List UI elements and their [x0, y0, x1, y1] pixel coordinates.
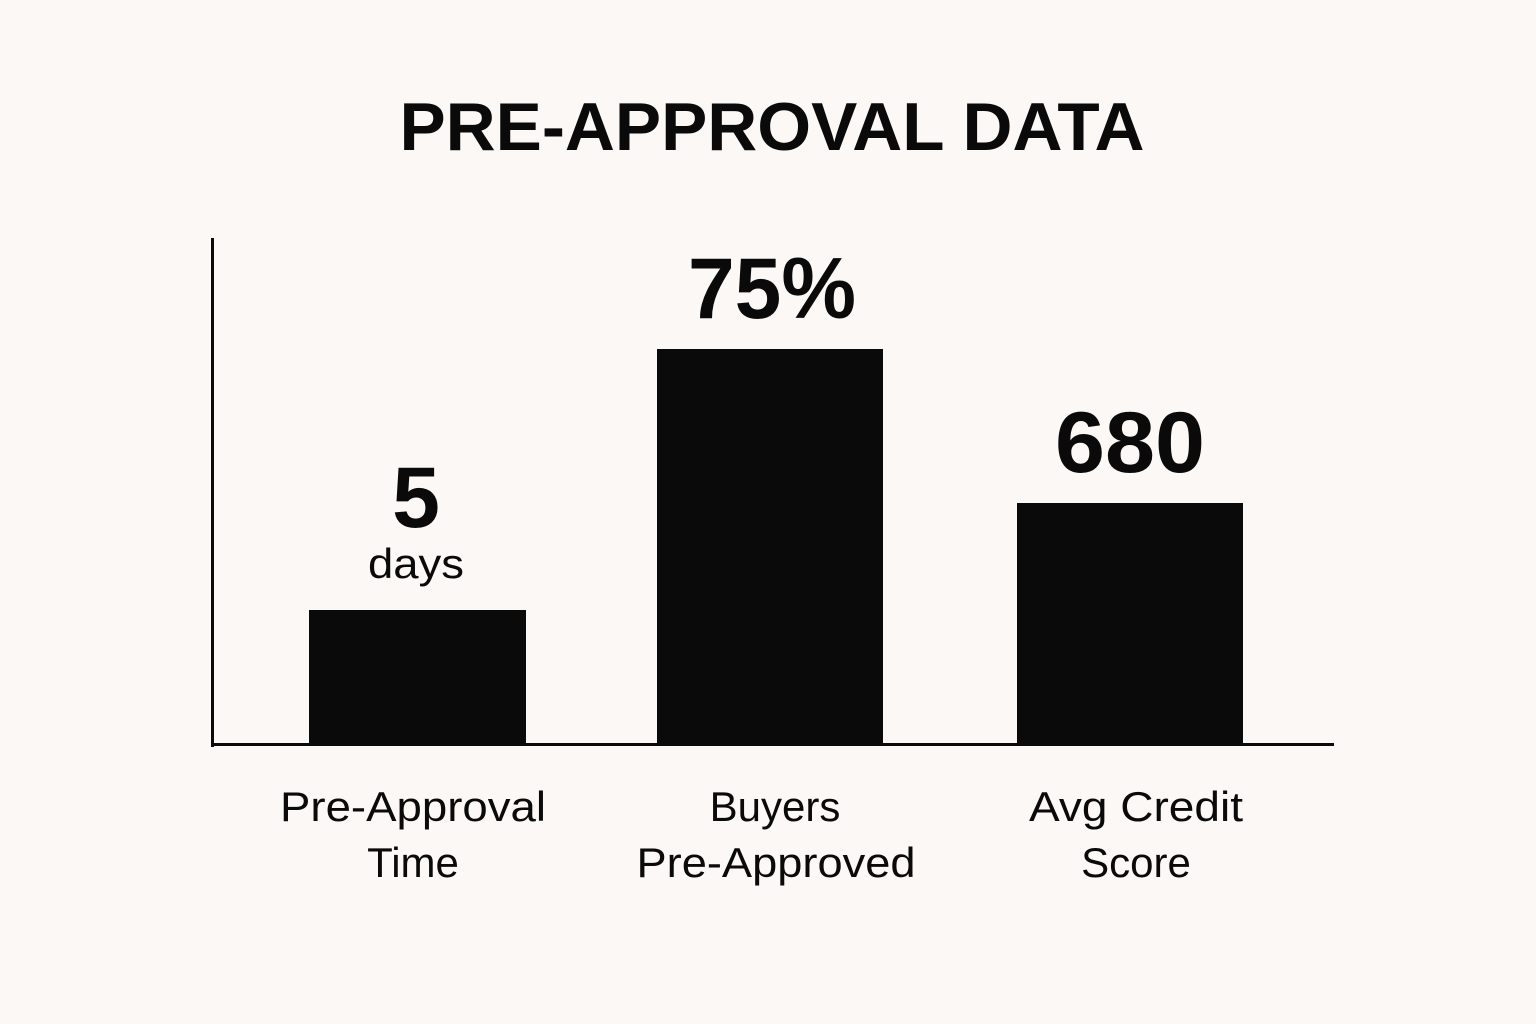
axes: [211, 238, 1334, 747]
bar: buyers pre-approved: [657, 349, 883, 745]
label: buyers pre-approved: [636, 783, 916, 886]
label: avg credit score: Score: [1081, 839, 1191, 886]
value: 5 days: days: [368, 540, 464, 587]
label: buyers pre-approved: Buyers: [710, 783, 840, 830]
bar: pre-approval time: [309, 610, 526, 745]
value: 75%: 75%: [688, 241, 856, 337]
bar: avg credit score: [1017, 503, 1243, 745]
label: pre-approval time: Time: [367, 839, 459, 886]
label: pre-approval time: [280, 783, 546, 886]
title: PRE-APPROVAL DATA: [400, 89, 1144, 165]
value: 5 days: 5: [392, 450, 440, 546]
label: avg credit score: Avg Credit: [1029, 783, 1243, 830]
label: avg credit score: [1029, 783, 1243, 886]
value: 5 days: [368, 450, 464, 587]
bar chart: [211, 238, 1334, 886]
label: buyers pre-approved: Pre-Approved: [636, 839, 916, 886]
value: 680: 680: [1055, 395, 1205, 491]
label: pre-approval time: Pre-Approval: [280, 783, 546, 830]
